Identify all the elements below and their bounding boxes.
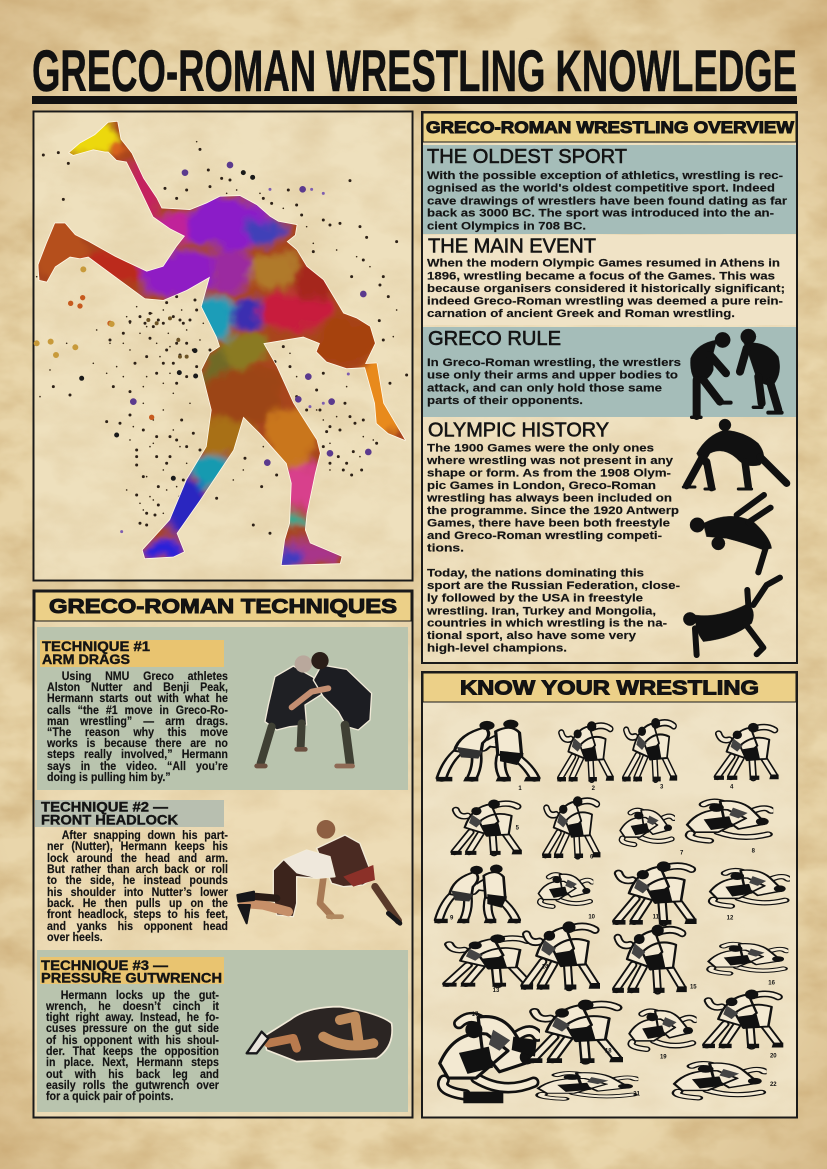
number labels: 20 — [770, 1054, 777, 1060]
section: Greco rule: attack, and can only hold those same — [427, 382, 662, 394]
section: Olympic history: countries in which wrestling is the na- — [427, 618, 667, 630]
photo: two wrestlers standing — [257, 652, 372, 766]
know your wrestling heading: KNOW YOUR WRESTLING — [460, 678, 759, 700]
section: the oldest sport: cave drawings of wrestlers have been found dating as far — [427, 195, 788, 207]
technique 2: front headlock: back. He then pulls up on the — [47, 897, 228, 910]
section: the oldest sport: cient Olympics in 708 BC. — [427, 220, 586, 232]
section: Greco rule: parts of their opponents. — [427, 395, 583, 407]
technique 3: pressure gutwrench: of his opponent with his shoul- — [46, 1034, 219, 1047]
technique 1: arm drags: works is because there are no — [47, 737, 228, 750]
section: the main event: indeed Greco-Roman wrestling was deemed a pure rein- — [427, 295, 783, 307]
number labels: 7 — [680, 850, 684, 856]
section: Olympic history: OLYMPIC HISTORY — [428, 420, 609, 442]
section: the oldest sport: back as 3000 BC. The sport was introduced into the an- — [427, 208, 774, 220]
section: Olympic history: and Greco-Roman wrestling competi- — [427, 530, 662, 542]
section: the main event: because organisers considered it historically significant; — [427, 283, 785, 295]
technique 2: front headlock: to the side, he instead pounds — [47, 874, 228, 887]
section: Olympic history: tions. — [427, 543, 464, 555]
photo: front headlock — [237, 820, 400, 923]
technique 3: pressure gutwrench: tight right away. Instead, he fo- — [46, 1011, 219, 1024]
technique 2: front headlock — [35, 800, 400, 948]
technique 2: front headlock: TECHNIQUE #2 — — [41, 800, 169, 815]
section: Greco rule: use only their arms and upper bodies to — [427, 370, 678, 382]
number labels: 17 — [472, 1012, 479, 1018]
number labels: 10 — [588, 915, 596, 921]
overview heading — [423, 113, 796, 142]
technique 2: front headlock: and yanks his opponent head — [47, 920, 228, 933]
technique 2: front headlock: ner (Nutter), Hermann keeps his — [47, 840, 228, 853]
technique 3: pressure gutwrench — [37, 950, 408, 1112]
section: the oldest sport — [423, 145, 796, 234]
technique 3: pressure gutwrench: in place. Next, Hermann steps — [46, 1056, 219, 1069]
icon: two wrestlers facing — [690, 329, 782, 417]
section: the main event: THE MAIN EVENT — [428, 236, 596, 258]
techniques heading — [35, 592, 411, 621]
section: Greco rule: GRECO RULE — [428, 328, 561, 350]
section: the oldest sport: ognised as the world's oldest competitive sport. Indeed — [427, 183, 775, 195]
section: Olympic history: The 1900 Games were the only ones — [427, 443, 654, 455]
technique 2: front headlock: front headlock, steps to his feet, — [47, 908, 228, 921]
number labels: 22 — [770, 1082, 777, 1088]
section: Olympic history: pic Games in London, Greco-Roman — [427, 480, 656, 492]
section: Olympic history: wrestling has always been included on — [426, 493, 672, 505]
technique 1: arm drags: TECHNIQUE #1 — [42, 639, 151, 654]
section: Olympic history: sport are the Russian Federation, close- — [427, 580, 680, 592]
number labels: 21 — [633, 1091, 641, 1097]
chart: 22 numbered wrestling holds — [434, 718, 788, 1103]
technique 3: pressure gutwrench: easily rolls the gutwrench over — [46, 1079, 219, 1092]
technique 2: front headlock: his shoulder into Nutter’s lower — [47, 886, 228, 899]
section: the oldest sport: With the possible exception of athletics, wrestling is rec- — [427, 170, 783, 182]
panel: Greco-Roman wrestling overview — [422, 112, 797, 663]
section: Olympic history: Today, the nations dominating this — [427, 568, 644, 580]
technique 1: arm drags: “The reason why this move — [47, 726, 228, 739]
technique 3: pressure gutwrench: for a quick pair of points. — [46, 1090, 173, 1103]
technique 3: pressure gutwrench: TECHNIQUE #3 — — [41, 958, 169, 973]
number labels: 15 — [690, 984, 697, 990]
technique 1: arm drags: Alston Nutter and Benji Peak, — [47, 681, 228, 694]
number labels: 8 — [752, 849, 756, 855]
technique 1: arm drags: ARM DRAGS — [42, 652, 130, 667]
section: Olympic history: the programme. Since the 1920 Antwerp — [427, 505, 679, 517]
section: the main event: carnation of ancient Greek and Roman wrestling. — [427, 308, 735, 320]
number labels: 16 — [768, 980, 776, 986]
overview heading: GRECO-ROMAN WRESTLING OVERVIEW — [426, 119, 794, 137]
section: Olympic history: high-level champions. — [427, 643, 567, 655]
section: Olympic history: where wrestling was not present in any — [426, 455, 674, 467]
technique 1: arm drags: doing is pulling him by.” — [47, 771, 171, 784]
number labels — [450, 785, 777, 1097]
section: Olympic history: tional sport, also have some very — [427, 630, 637, 642]
section: the oldest sport: THE OLDEST SPORT — [427, 146, 627, 168]
number labels: 2 — [592, 786, 596, 792]
technique 1: arm drags: steps really involved,” Hermann — [47, 748, 228, 761]
number labels: 11 — [653, 915, 660, 921]
section: Olympic history — [426, 419, 787, 655]
photo: gutwrench on the mat — [247, 1007, 392, 1062]
number labels: 1 — [518, 786, 522, 792]
panel: watercolor wrestlers illustration — [30, 110, 415, 580]
number labels: 6 — [590, 855, 594, 861]
icon: watercolor wrestlers silhouette — [30, 110, 415, 577]
number labels: 5 — [516, 825, 520, 831]
number labels: 12 — [727, 915, 734, 921]
section: Olympic history: wrestling. Iran, Turkey and Mongolia, — [426, 605, 656, 617]
section: Olympic history: shape or form. As from the 1908 Olym- — [427, 468, 671, 480]
number labels: 13 — [493, 988, 500, 994]
panel: know your wrestling — [422, 672, 797, 1118]
section: Greco rule — [423, 327, 796, 417]
icon: ink splatter — [37, 142, 407, 533]
technique 3: pressure gutwrench: PRESSURE GUTWRENCH — [41, 971, 222, 986]
number labels: 14 — [542, 964, 549, 970]
technique 3: pressure gutwrench: cuses pressure on the gut side — [46, 1022, 219, 1035]
technique 1: arm drags: says in the video. “All you’re — [47, 760, 228, 773]
technique 2: front headlock: FRONT HEADLOCK — [41, 812, 178, 827]
technique 1: arm drags: Hermann starts out with what he — [47, 692, 228, 705]
section: the main event: 1896, wrestling became a focus of the Games. This was — [427, 270, 775, 282]
section: Greco rule: In Greco-Roman wrestling, the wrestlers — [427, 357, 681, 369]
number labels: 18 — [605, 1049, 612, 1055]
technique 3: pressure gutwrench: wrench, he doesn’t cinch it — [46, 1000, 219, 1013]
number labels: 9 — [450, 915, 454, 921]
technique 1: arm drags — [37, 627, 408, 790]
technique 1: arm drags: calls “the #1 move in Greco-Ro- — [47, 704, 228, 717]
technique 2: front headlock: lock around the head and arm. — [47, 852, 228, 865]
number labels: 19 — [660, 1055, 667, 1061]
icon: three wrestling silhouettes — [683, 419, 787, 655]
section: the main event — [423, 235, 796, 325]
technique 3: pressure gutwrench: der. That keeps the opposition — [46, 1045, 219, 1058]
techniques heading: GRECO-ROMAN TECHNIQUES — [49, 596, 397, 618]
technique 3: pressure gutwrench: out with his back leg and — [46, 1068, 219, 1081]
panel: Greco-Roman techniques — [34, 590, 412, 1118]
number labels: 3 — [660, 785, 664, 791]
technique 1: arm drags: man wrestling” — arm drags. — [47, 715, 228, 728]
technique 2: front headlock: over heels. — [47, 931, 103, 944]
section: Olympic history: Games, there have been both freestyle — [427, 518, 670, 530]
section: the main event: When the modern Olympic Games resumed in Athens in — [427, 258, 780, 270]
number labels: 4 — [730, 785, 734, 791]
section: Olympic history: ly followed by the USA in freestyle — [427, 593, 643, 605]
know your wrestling heading — [423, 673, 796, 702]
technique 2: front headlock: But rather than arch back or roll — [47, 863, 228, 876]
